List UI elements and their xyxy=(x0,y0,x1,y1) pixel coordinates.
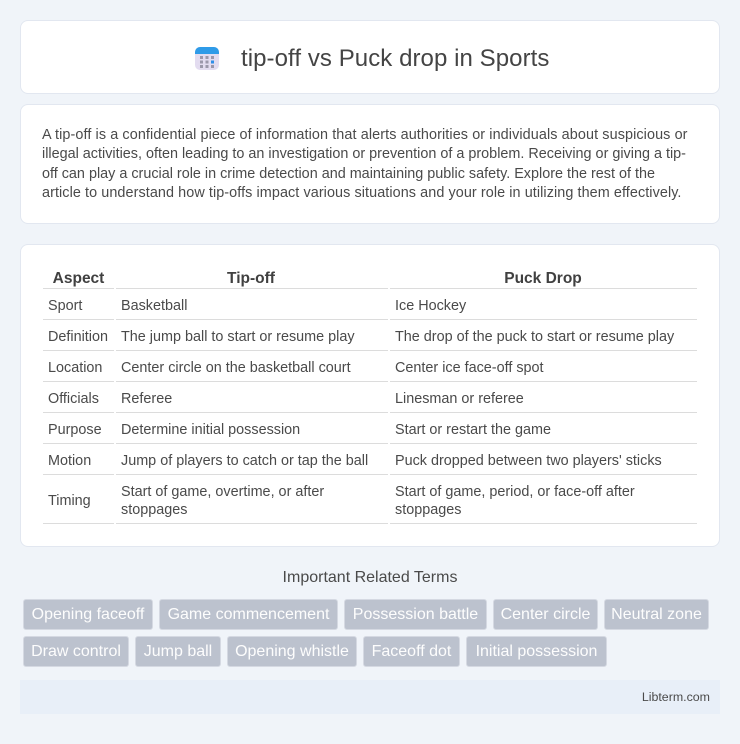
tag: Neutral zone xyxy=(611,606,702,623)
tag: Opening faceoff xyxy=(32,606,144,623)
tag: Initial possession xyxy=(476,643,597,660)
table header: Aspect xyxy=(53,270,104,287)
row: timing: stoppages xyxy=(395,502,461,518)
row: purpose: Purpose xyxy=(48,422,102,438)
table header: Puck Drop xyxy=(504,270,582,287)
table xyxy=(43,270,697,524)
related term tags xyxy=(23,599,709,667)
row: timing: Timing xyxy=(48,493,91,509)
row: timing: Start of game, overtime, or after xyxy=(121,484,324,500)
row: officials: Linesman or referee xyxy=(395,391,524,407)
comparison table card xyxy=(20,244,720,547)
tag xyxy=(363,636,460,667)
row: timing: stoppages xyxy=(121,502,187,518)
tag xyxy=(466,636,607,667)
row: timing xyxy=(43,484,697,524)
row: motion: Motion xyxy=(48,453,91,469)
row: purpose: Start or restart the game xyxy=(395,422,551,438)
tag: Possession battle xyxy=(353,606,478,623)
intro paragraph: article to understand how tip-offs impact various situations and your role in utilizing them effectively. xyxy=(42,185,682,201)
row: timing: Start of game, period, or face-off after xyxy=(395,484,635,500)
row: definition xyxy=(43,329,697,351)
title: tip-off vs Puck drop in Sports xyxy=(241,45,549,72)
row: location: Center circle on the basketball court xyxy=(121,360,351,376)
tag xyxy=(227,636,357,667)
intro paragraph: illegal activities, often leading to an investigation or prevention of a problem. Receiving or giving a tip- xyxy=(42,146,686,162)
row: sport: Ice Hockey xyxy=(395,298,466,314)
tag xyxy=(604,599,709,630)
tag xyxy=(344,599,487,630)
row: motion: Puck dropped between two players' sticks xyxy=(395,453,662,469)
tag xyxy=(23,599,153,630)
icon: calendar xyxy=(195,47,219,70)
row: sport: Basketball xyxy=(121,298,187,314)
table header xyxy=(43,270,697,289)
row: location xyxy=(43,360,697,382)
intro paragraph: A tip-off is a confidential piece of information that alerts authorities or individuals about suspicious or xyxy=(42,127,688,143)
tag xyxy=(159,599,338,630)
related terms heading: Important Related Terms xyxy=(283,569,457,586)
row: location: Center ice face-off spot xyxy=(395,360,544,376)
tag: Faceoff dot xyxy=(372,643,451,660)
table header: Tip-off xyxy=(227,270,275,287)
row: definition: The jump ball to start or resume play xyxy=(121,329,355,345)
tag: Game commencement xyxy=(168,606,329,623)
row: officials: Officials xyxy=(48,391,99,407)
row: motion: Jump of players to catch or tap the ball xyxy=(121,453,368,469)
tag: Draw control xyxy=(31,643,121,660)
row: sport: Sport xyxy=(48,298,82,314)
row: sport xyxy=(43,298,697,320)
intro paragraph xyxy=(42,127,688,201)
row: purpose: Determine initial possession xyxy=(121,422,300,438)
intro text card xyxy=(20,104,720,224)
row: officials: Referee xyxy=(121,391,172,407)
header card xyxy=(20,20,720,94)
row: officials xyxy=(43,391,697,413)
row: location: Location xyxy=(48,360,102,376)
tag: Jump ball xyxy=(144,643,212,660)
tag xyxy=(135,636,221,667)
intro paragraph: off can play a crucial role in crime detection and maintaining public safety. Explore the rest of the xyxy=(42,166,655,182)
footer bar xyxy=(20,680,720,714)
footer credit: Libterm.com xyxy=(642,690,710,704)
tag: Opening whistle xyxy=(235,643,349,660)
row: definition: Definition xyxy=(48,329,108,345)
row: motion xyxy=(43,453,697,475)
row: definition: The drop of the puck to start or resume play xyxy=(395,329,674,345)
row: purpose xyxy=(43,422,697,444)
tag xyxy=(493,599,598,630)
tag: Center circle xyxy=(501,606,590,623)
tag xyxy=(23,636,129,667)
